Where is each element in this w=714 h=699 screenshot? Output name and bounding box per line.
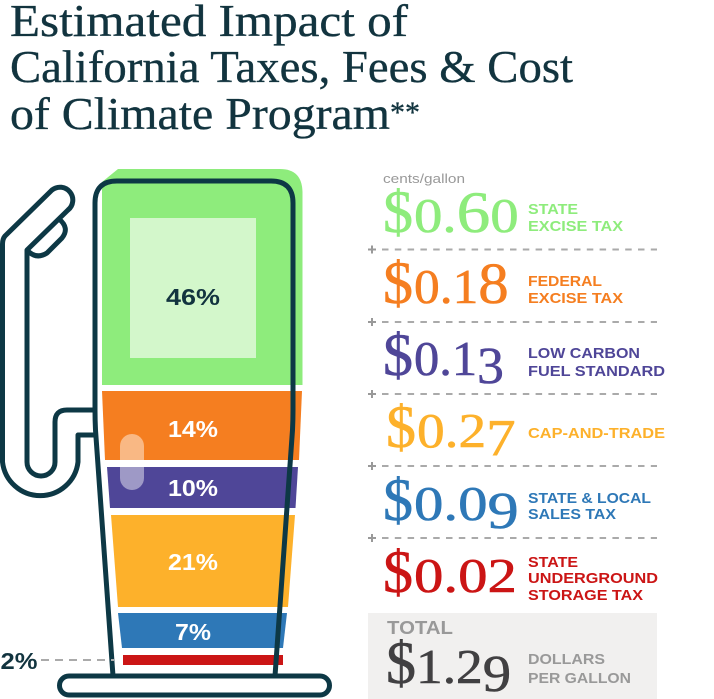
segment: low carbon fuel standard 10% [107, 467, 298, 508]
row: state and local sales tax [383, 467, 651, 540]
pump base [60, 676, 330, 695]
row: low carbon fuel standard: 3 [477, 338, 504, 395]
row: state underground storage tax: 0.02 [414, 549, 517, 603]
total panel: 1.2 [416, 640, 483, 694]
row dividers [368, 246, 657, 542]
row: federal excise tax: EXCISE TAX [528, 290, 623, 307]
row: federal excise tax [383, 250, 623, 316]
total panel: PER GALLON [528, 670, 631, 687]
row: state underground storage tax: STATE [528, 554, 578, 571]
row: state underground storage tax: UNDERGROUND [528, 570, 658, 587]
row: cap-and-trade: CAP-AND-TRADE [528, 425, 665, 442]
segment: state excise tax 46% [102, 169, 302, 385]
pump body outline [95, 181, 293, 676]
row: federal excise tax: FEDERAL [528, 273, 602, 290]
row: state and local sales tax: SALES TAX [528, 506, 616, 523]
title [10, 0, 573, 139]
label: 2% with leader line: 2% [0, 648, 38, 674]
row: low carbon fuel standard: $ [383, 322, 413, 388]
row: state and local sales tax: 9 [487, 483, 519, 540]
total panel: $ [386, 630, 416, 696]
total panel [368, 613, 657, 699]
row: state and local sales tax: 0.0 [414, 477, 487, 531]
title: ** [390, 96, 420, 129]
row: cap-and-trade: 7 [486, 410, 516, 467]
gas pump chart [0, 169, 330, 695]
row: state underground storage tax [383, 539, 658, 605]
row: low carbon fuel standard: LOW CARBON [528, 345, 640, 362]
unit label: cents/gallon [383, 171, 465, 186]
row: cap-and-trade: 0.2 [417, 404, 486, 458]
row: state excise tax [383, 179, 623, 245]
label: 10%: 10% [168, 475, 218, 501]
row: state excise tax: $ [383, 179, 413, 245]
label: 2% with leader line [0, 648, 114, 674]
row: federal excise tax: 0.18 [414, 251, 509, 316]
row: state excise tax: EXCISE TAX [528, 218, 623, 235]
row: low carbon fuel standard: 0.1 [414, 332, 477, 386]
total panel: DOLLARS [528, 651, 605, 668]
pump window [130, 218, 256, 358]
title: California Taxes, Fees & Cost [10, 41, 573, 92]
row: state underground storage tax: STORAGE TAX [528, 587, 643, 604]
label: 21%: 21% [168, 549, 218, 575]
row: state and local sales tax: STATE & LOCAL [528, 490, 651, 507]
row: state and local sales tax: $ [383, 467, 413, 533]
segment: cap-and-trade 21% [111, 515, 295, 607]
total panel: TOTAL [387, 618, 453, 638]
row: state excise tax: STATE [528, 201, 578, 218]
row: state excise tax: 0.60 [414, 180, 519, 245]
row: federal excise tax: $ [383, 250, 413, 316]
label: 46%: 46% [166, 284, 220, 310]
title: of Climate Program [10, 88, 390, 139]
highlight on pump [120, 434, 144, 490]
row: cap-and-trade: $ [386, 394, 416, 460]
row: low carbon fuel standard: FUEL STANDARD [528, 363, 665, 380]
row: cap-and-trade [386, 394, 665, 467]
segment: state and local sales tax 7% [118, 613, 287, 648]
row: low carbon fuel standard [383, 322, 665, 395]
label: 7%: 7% [175, 619, 211, 645]
segment: federal excise tax 14% [102, 391, 302, 460]
segment: state underground storage tax 2% [123, 655, 283, 665]
label: 14%: 14% [168, 416, 218, 442]
hose and nozzle [2, 187, 97, 496]
row: state underground storage tax: $ [383, 539, 413, 605]
